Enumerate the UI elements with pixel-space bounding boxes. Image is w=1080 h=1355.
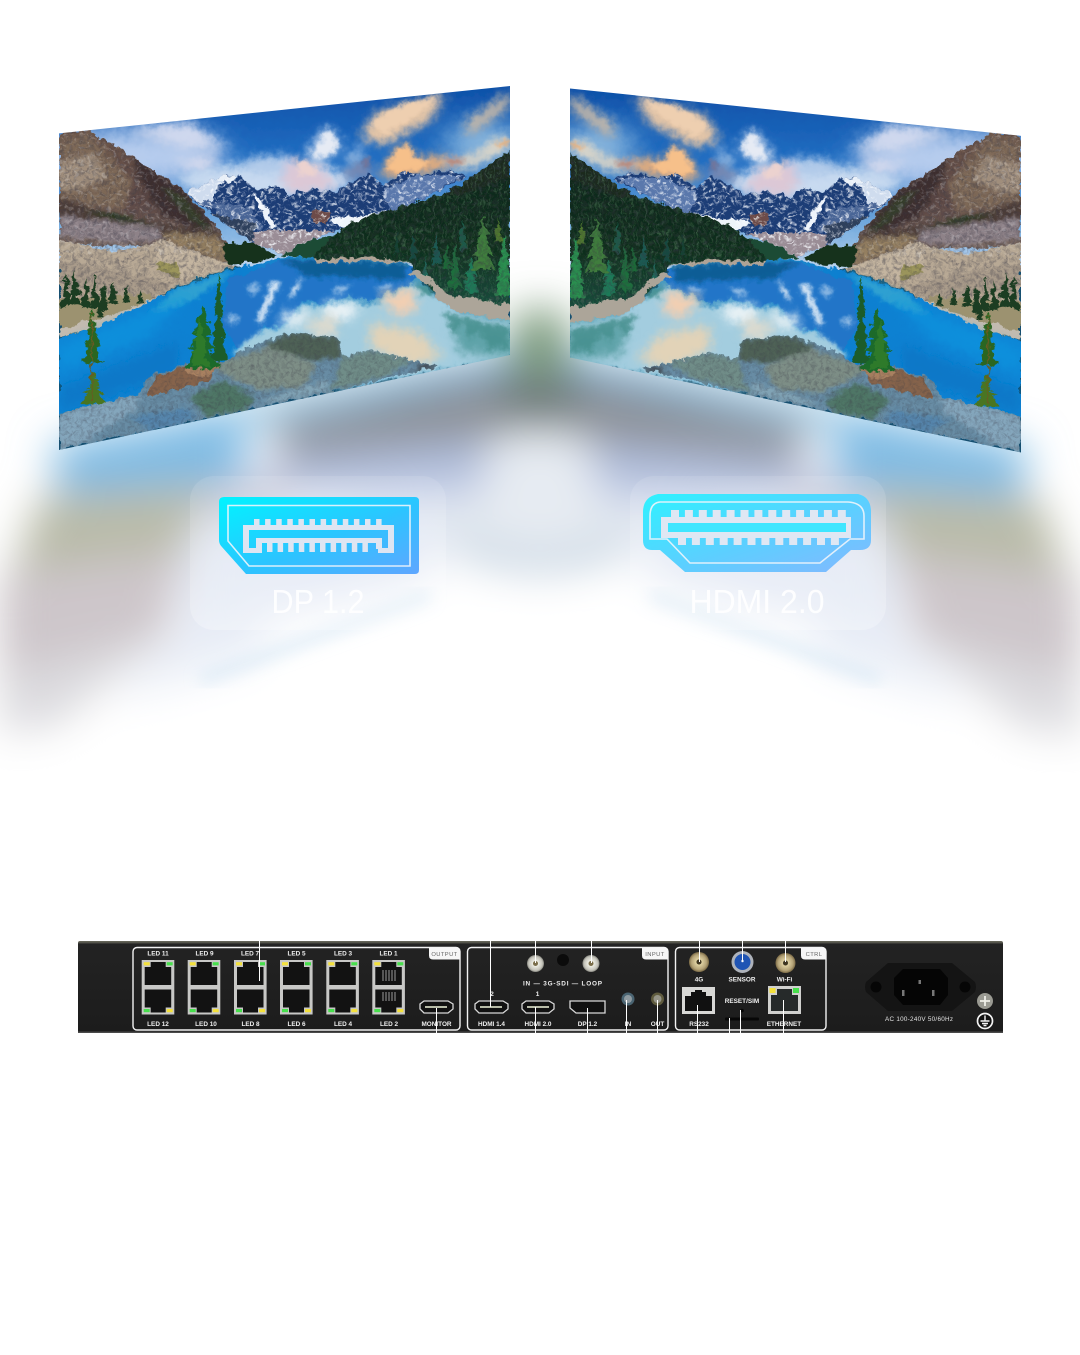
label: HDMI 2.0: HDMI 2.0 [690,583,824,620]
HDMI 1.4 and 2.0 ports: 2 [490,991,494,998]
sky [50,80,520,267]
left side reflected colours [50,405,245,495]
LED ports [142,960,174,1014]
reset and SIM: RESET/SIM [725,998,759,1005]
panel: control group: 4G [695,976,703,984]
panel: control group: Wi-Fi [777,976,793,984]
white wedge fading the reflection out [0,590,1080,860]
chassis [78,941,1003,1033]
left shore trees [59,270,157,337]
foreground rocks [59,333,437,450]
sensor connector [732,951,754,973]
power rating: AC 100-240V 50/60Hz [885,1016,953,1023]
LED labels: LED 6 [287,1021,306,1028]
3G-SDI connectors [527,955,544,972]
card background [190,476,446,630]
LED labels: LED 4 [334,1021,352,1028]
RS232 port [682,987,715,1014]
reflected clouds [232,285,510,390]
input labels: HDMI 1.4 [478,1021,505,1028]
Ethernet port [768,986,801,1014]
device rear panel [78,941,1003,1033]
panel: HDMI 2.0 [630,476,886,630]
panel: input group: 1 [536,991,540,998]
icon: DisplayPort connector [219,497,419,574]
dark valley [223,243,277,264]
blurred reflection of the two screens [0,310,1080,900]
panel: output group: OUTPUT [431,952,458,958]
panel: input group: IN [625,1021,632,1028]
scree slope [59,240,237,328]
panel: input group: HDMI 2.0 [524,1021,552,1028]
label: DP 1.2: DP 1.2 [272,583,364,620]
ctrl tab [801,948,826,960]
screen: right landscape (mirrored) [557,82,1040,462]
input tab [642,948,668,960]
panel: input group: IN — 3G-SDI — LOOP [523,980,603,988]
panel: control group: SENSOR [728,976,756,984]
LED labels: LED 11 [147,950,169,958]
output tab [429,948,460,960]
LED labels: LED 10 [195,1021,217,1028]
right forest hillside [312,151,510,313]
panel: control group: RS232 [689,1021,709,1028]
monitor port [420,1001,453,1013]
icon: HDMI connector [643,494,871,572]
LED labels: LED 7 [241,950,259,958]
LED labels: LED 9 [195,950,214,958]
panel: input group: OUT [651,1021,664,1028]
center glow: pale disc and dark reflected forest [405,425,675,575]
Wi-Fi antenna [776,953,796,973]
screen: left landscape [40,80,523,460]
central snowy mountains [185,169,467,253]
LED labels: LED 5 [287,950,306,958]
panel: output group [133,948,460,1030]
LED labels: LED 1 [379,950,398,958]
clouds [130,92,510,195]
scene base [50,247,520,460]
pale streaks in the reflection [200,595,880,680]
left rocky mountain [59,130,230,263]
LED labels [147,950,398,1028]
panel: input group [468,948,668,1030]
panel: control group: ETHERNET [767,1021,801,1028]
LED labels: LED 2 [380,1021,398,1028]
LED labels: LED 12 [147,1021,169,1028]
DP port [570,1001,605,1013]
power inlet [865,963,976,1023]
card background [630,476,886,630]
4G antenna [689,952,709,972]
panel: DP 1.2 [190,476,446,630]
lake [59,257,510,450]
gravel shoreline [407,270,510,322]
panel: input group: DP 1.2 [578,1021,598,1028]
foreground pines [80,273,227,405]
LED labels: LED 3 [334,950,352,958]
icon: grounding screw and symbol [977,993,993,1028]
panel: control group [676,948,826,1030]
panel: input group: INPUT [645,952,665,958]
right side reflected colours [835,408,1030,498]
LED labels: LED 8 [241,1021,260,1028]
panel: control group: CTRL [806,952,823,958]
callout leader lines [260,941,786,1033]
sync jacks [622,992,634,1006]
reflected mountains [223,260,413,347]
panel: output group: MONITOR [421,1021,452,1028]
